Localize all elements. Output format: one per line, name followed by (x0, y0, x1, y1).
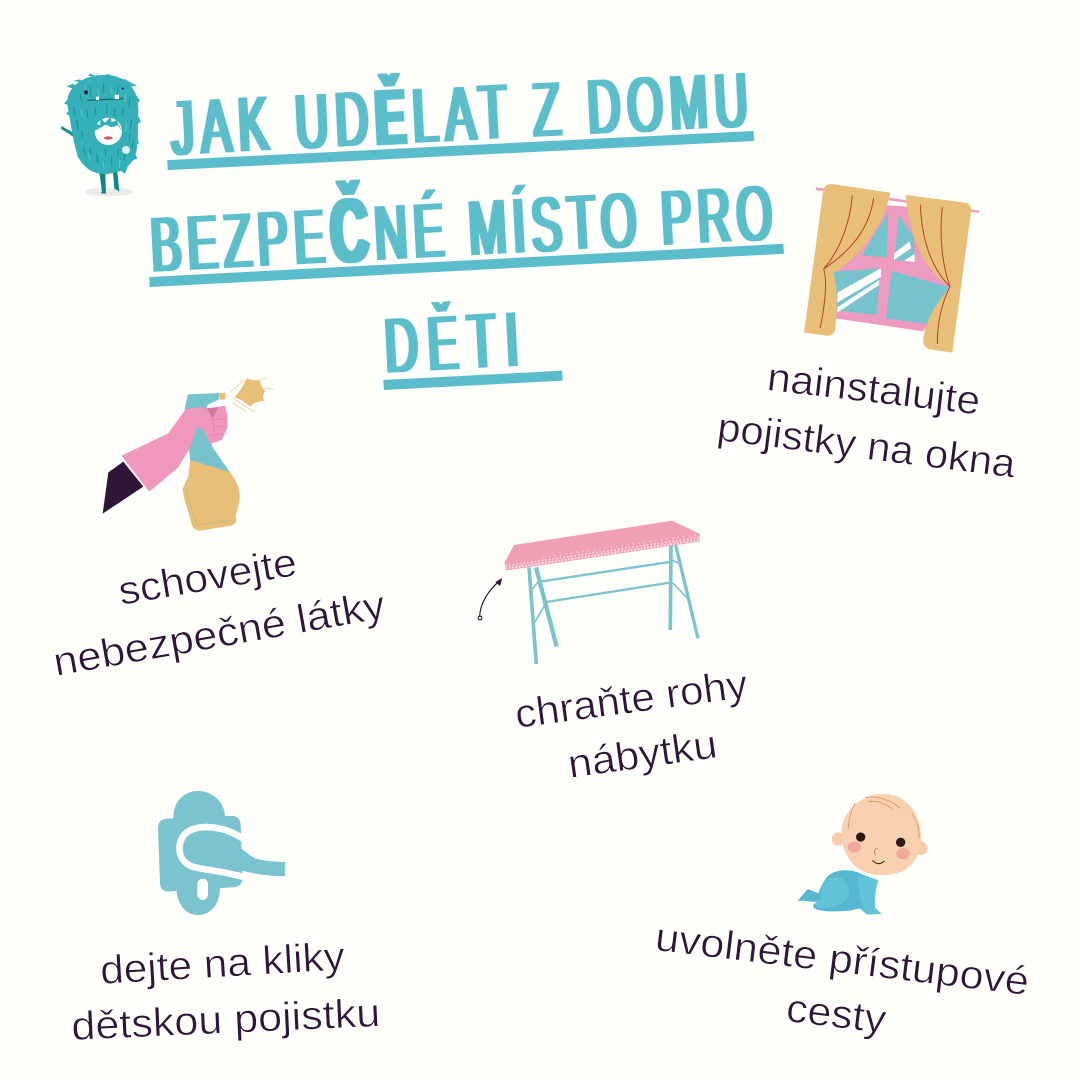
text: schovejte nebezpečné látky (50, 540, 388, 685)
text: schovejte nebezpečné látky: nebezpečné látky (50, 583, 388, 685)
icon: crawling baby (798, 794, 928, 914)
text: uvolněte přístupové cesty: cesty (784, 986, 889, 1042)
text: chraňte rohy nábytku (512, 662, 750, 787)
text: chraňte rohy nábytku: nábytku (565, 722, 720, 787)
text: uvolněte přístupové cesty (653, 915, 1031, 1042)
icon: gloved hand with spray bottle (103, 377, 274, 531)
text: chraňte rohy nábytku: chraňte rohy (512, 662, 750, 737)
text: dejte na kliky dětskou pojistku: dejte na kliky (99, 935, 346, 993)
text: dejte na kliky dětskou pojistku (70, 935, 381, 1049)
icon: table with pink top and arrow (478, 521, 700, 664)
title line 3: DĚTI (383, 295, 520, 390)
text: schovejte nebezpečné látky: schovejte (115, 540, 300, 614)
title (145, 55, 784, 390)
icon: door handle (158, 791, 285, 915)
title line 2: BEZPEČNÉ MÍSTO PRO (148, 157, 774, 291)
icon: furry teal monster mascot (61, 73, 141, 196)
icon: window with curtains (804, 184, 979, 353)
text: nainstalujte pojistky na okna (715, 355, 1019, 487)
title line 1: JAK UDĚLAT Z DOMU (169, 55, 750, 172)
icon: small curved arrow (478, 578, 502, 620)
text: nainstalujte pojistky na okna: pojistky na okna (715, 405, 1019, 487)
text: nainstalujte pojistky na okna: nainstalujte (765, 355, 983, 424)
text: uvolněte přístupové cesty: uvolněte přístupové (653, 915, 1031, 1004)
text: dejte na kliky dětskou pojistku: dětskou pojistku (70, 991, 381, 1049)
